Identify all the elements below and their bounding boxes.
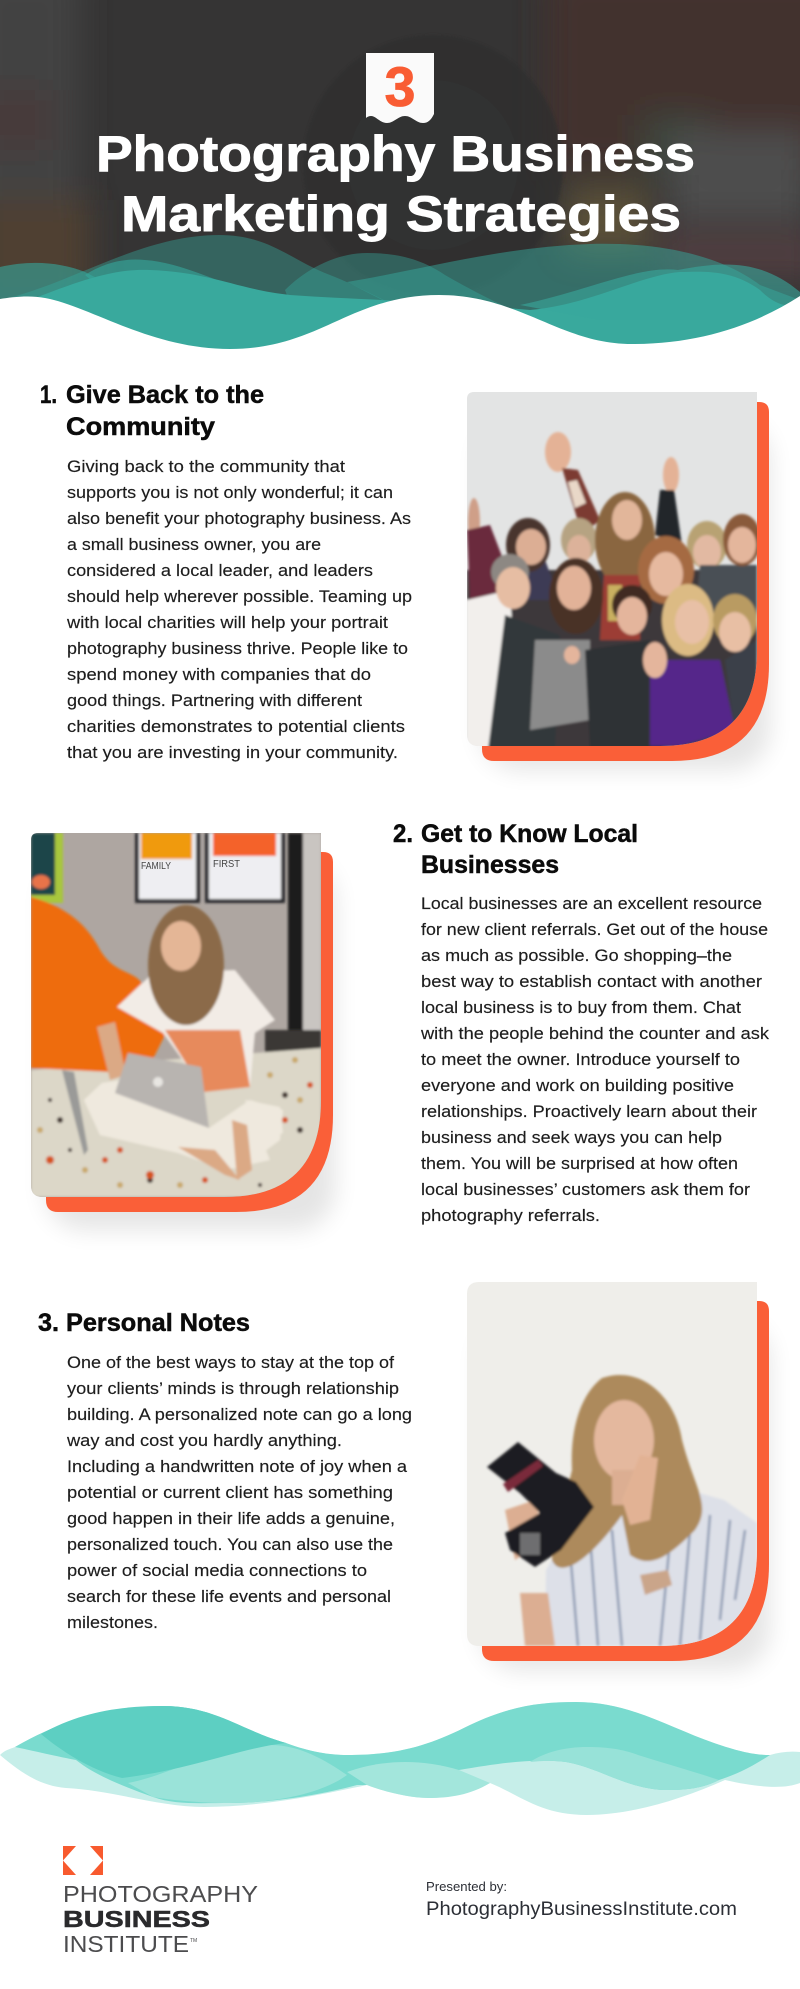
heading 1	[40, 381, 264, 441]
heading 3: Personal Notes	[66, 1309, 250, 1337]
body 3: personalized touch. You can also use the	[67, 1535, 393, 1554]
orange backing	[482, 1301, 769, 1661]
body 2: photography referrals.	[421, 1206, 600, 1225]
heading 2: 2.	[393, 820, 413, 848]
heading 1: 1.	[40, 381, 57, 409]
heading 2: Get to Know Local	[421, 820, 638, 848]
body 3: power of social media connections to	[67, 1561, 367, 1580]
body 1	[66, 457, 412, 762]
poster labels	[142, 860, 240, 869]
body 2: as much as possible. Go shopping–the	[421, 946, 732, 965]
body 1: supports you is not only wonderful; it can	[67, 483, 393, 502]
body 2	[420, 894, 770, 1225]
body 1: charities demonstrates to potential clients	[67, 717, 405, 736]
body 2: local business is to buy from them. Chat	[421, 998, 741, 1017]
logo mark	[63, 1846, 103, 1875]
body 1: a small business owner, you are	[67, 535, 321, 554]
poster labels: FIRST	[213, 859, 240, 870]
body 2: everyone and work on building positive	[421, 1076, 734, 1095]
wordmark: INSTITUTE	[63, 1931, 189, 1957]
banner with number 3	[366, 53, 434, 123]
body 3: search for these life events and personal	[67, 1587, 391, 1606]
heading 2: Businesses	[421, 851, 559, 879]
title: Marketing Strategies	[121, 186, 681, 242]
body 2: with the people behind the counter and ask	[420, 1024, 770, 1043]
section 1 text	[40, 381, 412, 762]
presented by: Presented by:	[426, 1879, 507, 1894]
heading 1: Give Back to the	[66, 381, 264, 409]
body 1: photography business thrive. People like to	[67, 639, 408, 658]
lightest silhouette	[0, 1702, 800, 1815]
dark hump	[41, 1706, 286, 1778]
body 1: Giving back to the community that	[67, 457, 345, 476]
wordmark: PHOTOGRAPHY	[63, 1881, 258, 1907]
body 2: them. You will be surprised at how often	[421, 1154, 738, 1173]
heading 3: 3.	[38, 1309, 59, 1337]
body 2: for new client referrals. Get out of the house	[421, 920, 768, 939]
body 2: local businesses’ customers ask them for	[421, 1180, 750, 1199]
body 2: to meet the owner. Introduce yourself to	[421, 1050, 740, 1069]
body 3: way and cost you hardly anything.	[66, 1431, 342, 1450]
section 2 text	[393, 820, 770, 1225]
heading 2	[393, 820, 638, 879]
mid patches	[128, 1745, 347, 1803]
orange backing	[482, 402, 769, 761]
body 1: considered a local leader, and leaders	[67, 561, 373, 580]
body 1: spend money with companies that do	[67, 665, 371, 684]
title	[96, 126, 695, 242]
photo panel 2: woman with laptop on orange chair	[31, 833, 335, 1230]
title: Photography Business	[96, 126, 695, 182]
body 3	[66, 1353, 412, 1632]
heading 1: Community	[66, 413, 215, 441]
body 3: milestones.	[67, 1613, 158, 1632]
body 3: your clients’ minds is through relationship	[67, 1379, 399, 1398]
body 1: should help wherever possible. Teaming up	[67, 587, 412, 606]
wordmark	[63, 1881, 258, 1957]
body 2: relationships. Proactively learn about their	[421, 1102, 757, 1121]
body 2: business and seek ways you can help	[421, 1128, 722, 1147]
presented by	[426, 1879, 737, 1920]
section 3 text	[38, 1309, 412, 1632]
wordmark: BUSINESS	[63, 1906, 210, 1932]
photo	[467, 392, 761, 750]
body 2: Local businesses are an excellent resource	[421, 894, 762, 913]
photo	[467, 1282, 757, 1646]
body 1: that you are investing in your community.	[67, 743, 398, 762]
photo	[31, 833, 321, 1197]
header teal waves	[0, 235, 800, 360]
footer teal waves	[0, 1702, 800, 1815]
orange backing	[46, 852, 333, 1212]
body 1: good things. Partnering with different	[67, 691, 362, 710]
photo panel 3: woman with camera	[467, 1282, 770, 1670]
body 3: potential or current client has something	[67, 1483, 393, 1502]
wordmark: TM	[190, 1938, 197, 1944]
body 3: good happen in their life adds a genuine,	[67, 1509, 395, 1528]
photo panel 1: group of women	[467, 392, 770, 770]
logo: Photography Business Institute	[63, 1846, 258, 1957]
body 1: also benefit your photography business. As	[67, 509, 411, 528]
body 3: building. A personalized note can go a long	[67, 1405, 412, 1424]
body 1: with local charities will help your portrait	[66, 613, 388, 632]
presented by: PhotographyBusinessInstitute.com	[426, 1898, 737, 1920]
body 3: One of the best ways to stay at the top of	[67, 1353, 394, 1372]
ribbon shape	[366, 53, 434, 123]
body 3: Including a handwritten note of joy when a	[67, 1457, 408, 1476]
body 2: best way to establish contact with another	[421, 972, 762, 991]
header background photo	[0, 0, 800, 310]
main layer	[15, 1702, 770, 1803]
number: 3	[384, 55, 416, 118]
poster labels: FAMILY	[141, 861, 171, 872]
